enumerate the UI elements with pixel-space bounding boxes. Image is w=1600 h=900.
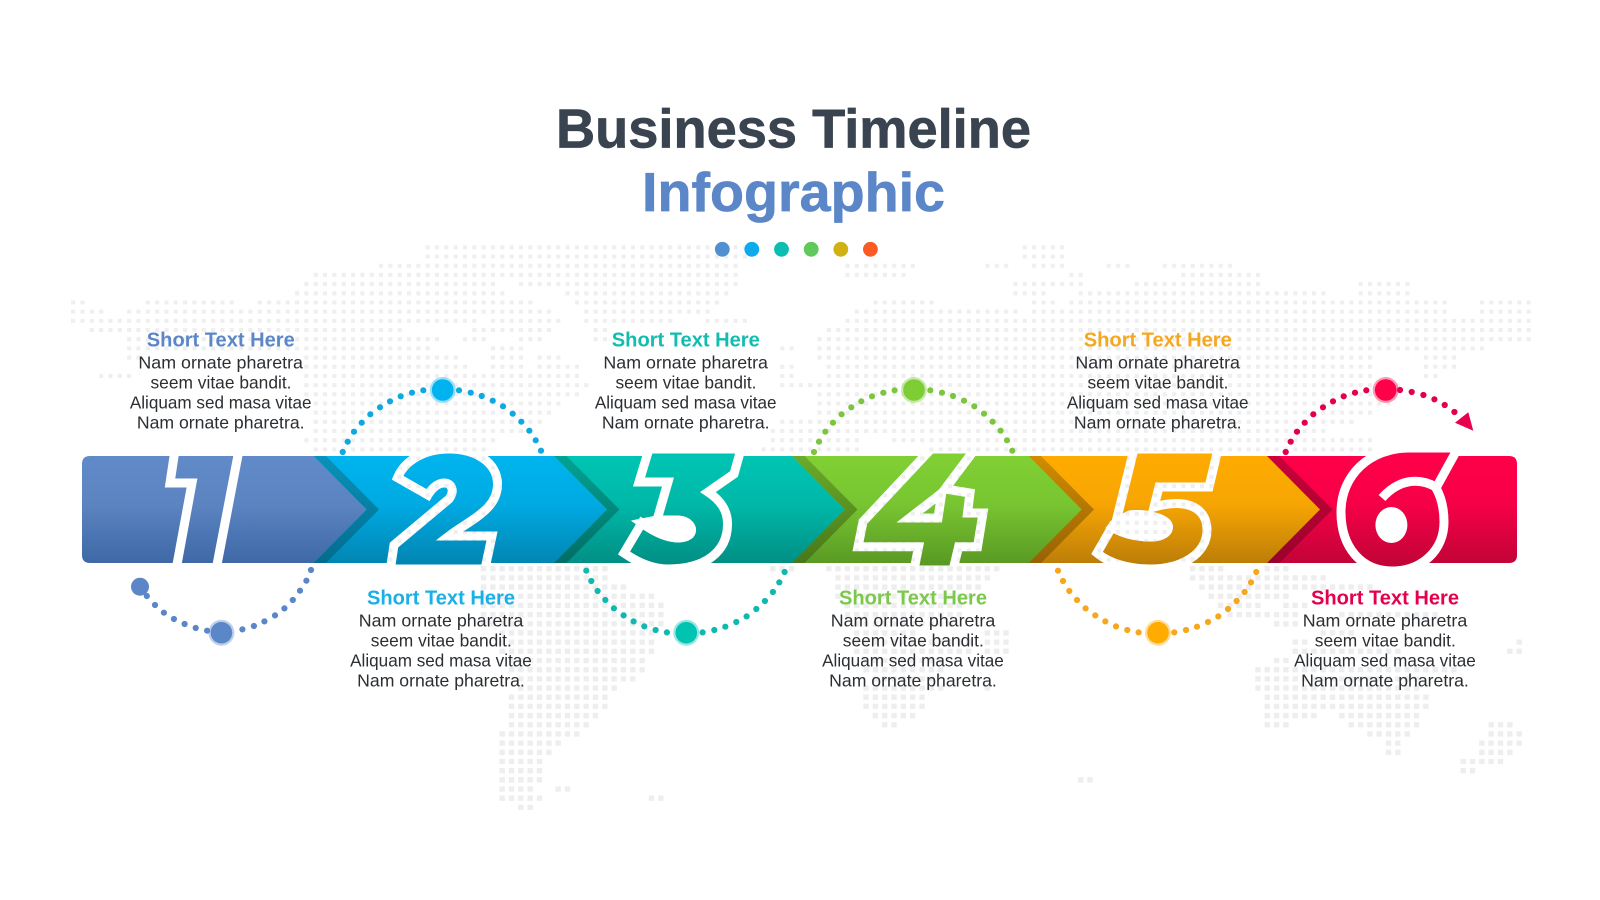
dotted arc 5 with node	[1058, 571, 1256, 646]
text block 1: seem vitae bandit.	[150, 373, 292, 393]
segment 3 with number 3	[554, 449, 845, 569]
text block 6: Nam ornate pharetra	[1303, 611, 1468, 631]
text block 5: Nam ornate pharetra.	[1074, 413, 1242, 433]
title colour dots	[715, 242, 878, 257]
text block 5: Aliquam sed masa vitae	[1067, 393, 1249, 413]
text block 3: Nam ornate pharetra	[603, 353, 768, 373]
title	[556, 98, 1031, 223]
segment 6 with number 6	[1267, 448, 1517, 571]
text block 5: Short Text Here	[1084, 329, 1232, 351]
dotted arc 1 with start dot and node	[131, 570, 311, 646]
dotted arc 3 with node	[586, 571, 785, 646]
text block 3: seem vitae bandit.	[616, 373, 756, 393]
segment 4 with number 4	[792, 449, 1082, 570]
text block 4	[822, 587, 1004, 691]
text block 2: Aliquam sed masa vitae	[350, 651, 532, 671]
text block 3: Short Text Here	[612, 329, 760, 351]
text block 2: Nam ornate pharetra	[359, 611, 524, 631]
title: Business Timeline	[556, 98, 1031, 160]
text block 5: Nam ornate pharetra	[1075, 353, 1240, 373]
text block 2: Short Text Here	[367, 587, 515, 609]
segment 2 with number 2	[314, 449, 607, 569]
text block 4: Aliquam sed masa vitae	[822, 651, 1004, 671]
text block 4: Short Text Here	[839, 587, 987, 609]
text block 1: Nam ornate pharetra.	[137, 413, 305, 433]
text block 3	[595, 329, 777, 433]
text block 3: Aliquam sed masa vitae	[595, 393, 777, 413]
text block 4: seem vitae bandit.	[843, 631, 984, 651]
dotted world map background	[71, 247, 1532, 807]
dotted arc 4 with node	[814, 377, 1012, 452]
text block 1	[130, 329, 312, 433]
text block 4: Nam ornate pharetra.	[829, 671, 997, 691]
segment 5 with number 5	[1029, 449, 1320, 569]
text block 6	[1294, 587, 1476, 691]
text block 1: Nam ornate pharetra	[138, 353, 303, 373]
dotted arc 2 with node	[343, 377, 541, 452]
dotted arc 6 with node and arrow	[1286, 377, 1473, 452]
title: Infographic	[642, 161, 945, 223]
text block 6: Aliquam sed masa vitae	[1294, 651, 1476, 671]
text block 6: Nam ornate pharetra.	[1301, 671, 1469, 691]
text block 3: Nam ornate pharetra.	[602, 413, 770, 433]
text block 6: Short Text Here	[1311, 587, 1459, 609]
text block 5: seem vitae bandit.	[1088, 373, 1228, 393]
text block 2: seem vitae bandit.	[371, 631, 512, 651]
text block 5	[1067, 329, 1249, 433]
timeline bar	[82, 448, 1517, 571]
text block 1: Short Text Here	[147, 329, 295, 351]
text block 6: seem vitae bandit.	[1315, 631, 1456, 651]
segment 1 with number 1	[82, 456, 367, 563]
text block 4: Nam ornate pharetra	[831, 611, 996, 631]
text block 2	[350, 587, 532, 691]
text block 1: Aliquam sed masa vitae	[130, 393, 312, 413]
text block 2: Nam ornate pharetra.	[357, 671, 525, 691]
